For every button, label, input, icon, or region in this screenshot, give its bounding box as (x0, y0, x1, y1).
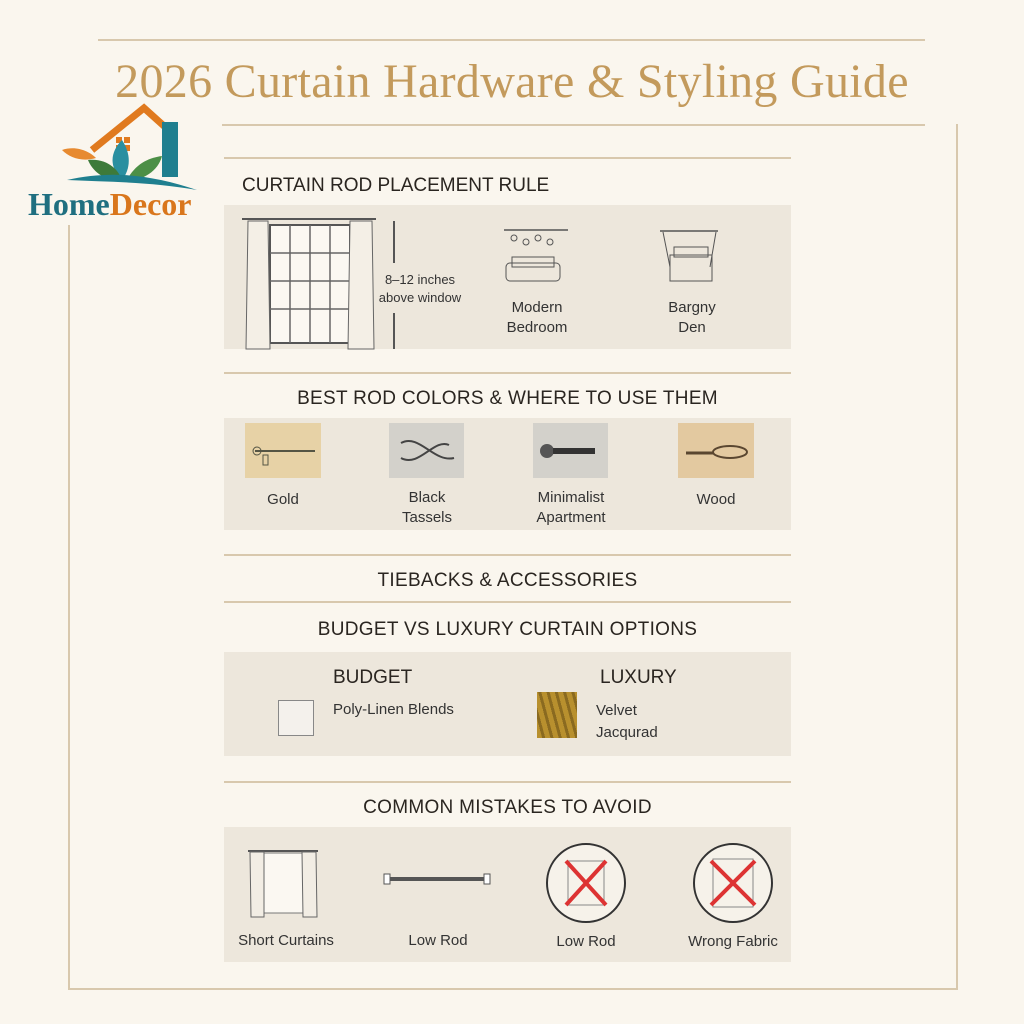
budget column (278, 667, 454, 736)
panel: mistakes (224, 827, 791, 962)
panel: rod colors: Gold (267, 491, 299, 508)
luxury column (537, 667, 677, 741)
icon: velvet swatch (537, 692, 577, 738)
panel: rod colors: Wood (697, 491, 735, 508)
heading: mistakes: COMMON MISTAKES TO AVOID (363, 797, 652, 818)
panel: mistakes: Low Rod (556, 933, 616, 950)
panel: rod colors: Tassels (402, 509, 452, 526)
icon: crossed low rod (546, 843, 626, 923)
panel: mistakes: Short Curtains (238, 932, 334, 949)
icon: short curtains (248, 850, 318, 918)
logo: HomeDecor (28, 186, 191, 222)
panel: rod colors (224, 418, 791, 530)
panel: rod placement: above window (379, 290, 461, 305)
panel: rod colors: Black (409, 489, 445, 506)
swatch: wood (678, 423, 754, 478)
luxury column: LUXURY (600, 667, 677, 688)
frame (68, 124, 958, 990)
panel: rod placement: 8–12 inches (385, 272, 455, 287)
icon: linen swatch (278, 700, 314, 736)
heading: budget vs luxury: BUDGET VS LUXURY CURTAIN OPTIONS (318, 619, 697, 640)
panel: rod placement: Bargny (668, 299, 716, 316)
panel: rod colors: Minimalist (538, 489, 604, 506)
title: 2026 Curtain Hardware & Styling Guide (115, 55, 909, 108)
icon: crossed wrong fabric (693, 843, 773, 923)
budget column: BUDGET (333, 667, 412, 688)
heading: rod placement: CURTAIN ROD PLACEMENT RULE (242, 175, 549, 196)
luxury column: Jacqurad (596, 724, 658, 741)
icon: bed (660, 230, 718, 282)
icon: sofa (504, 229, 568, 282)
panel: rod placement (224, 205, 791, 349)
icon: low rod (384, 874, 490, 884)
luxury column: Velvet (596, 702, 637, 719)
panel: budget vs luxury (224, 652, 791, 756)
swatch: minimalist (533, 423, 608, 478)
panel: rod placement: Bedroom (507, 319, 567, 336)
heading: tiebacks: TIEBACKS & ACCESSORIES (377, 570, 638, 591)
panel: mistakes: Wrong Fabric (688, 933, 778, 950)
heading: rod colors: BEST ROD COLORS & WHERE TO USE THEM (297, 388, 718, 409)
swatch: black tassels (389, 423, 464, 478)
panel: rod placement: Modern (512, 299, 562, 316)
panel: rod colors: Apartment (536, 509, 606, 526)
panel: mistakes: Low Rod (408, 932, 468, 949)
logo (22, 100, 222, 225)
icon: window with curtains (242, 218, 395, 350)
swatch: gold (245, 423, 321, 478)
panel: rod placement: Den (678, 319, 706, 336)
budget column: Poly-Linen Blends (333, 701, 454, 718)
